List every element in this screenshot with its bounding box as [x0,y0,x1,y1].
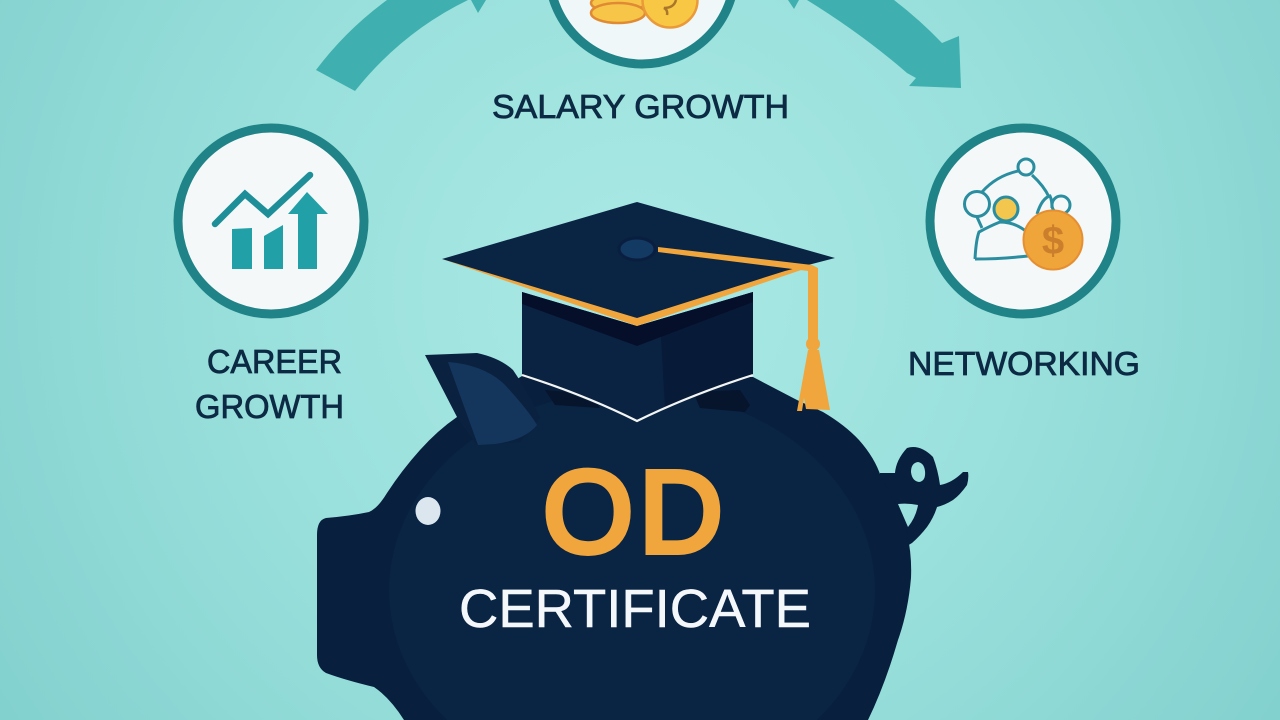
icon: rising chart [215,175,328,269]
icon: network of people with coin [964,159,1082,270]
icon ring: career growth [178,128,364,314]
pig tail [880,447,968,550]
label: salary growth: SALARY GROWTH [492,88,789,125]
cap board [442,202,835,318]
graduation cap [442,202,835,421]
panel: networking [908,128,1140,382]
pig body [317,376,911,720]
label: career growth: CAREER [207,343,342,380]
icon ring: salary growth [549,0,735,64]
tassel [658,247,830,411]
cap base trim [522,375,753,421]
heading: OD: OD [543,447,723,577]
arrow: salary growth to networking [788,0,961,88]
label: career growth [195,343,344,425]
pig ear [425,353,540,445]
cap base right shade [660,292,753,408]
icon ring: networking [930,128,1116,314]
icon: dollar coin: $ [1042,219,1064,263]
cap shadow on pig [545,390,750,412]
icon: coins [591,0,698,28]
label: career growth: GROWTH [195,388,344,425]
pig body highlight [389,390,875,720]
cap button [619,238,655,260]
pig eye [416,497,440,525]
label: networking: NETWORKING [908,345,1140,382]
cap board edge [442,259,810,326]
arrow: career growth to salary growth [316,0,486,91]
panel: salary growth [492,0,789,125]
cap base [522,292,753,420]
piggy bank [317,353,968,720]
panel: career growth [178,128,364,425]
cap base band shade [522,292,753,346]
heading: certificate: CERTIFICATE [459,579,811,639]
